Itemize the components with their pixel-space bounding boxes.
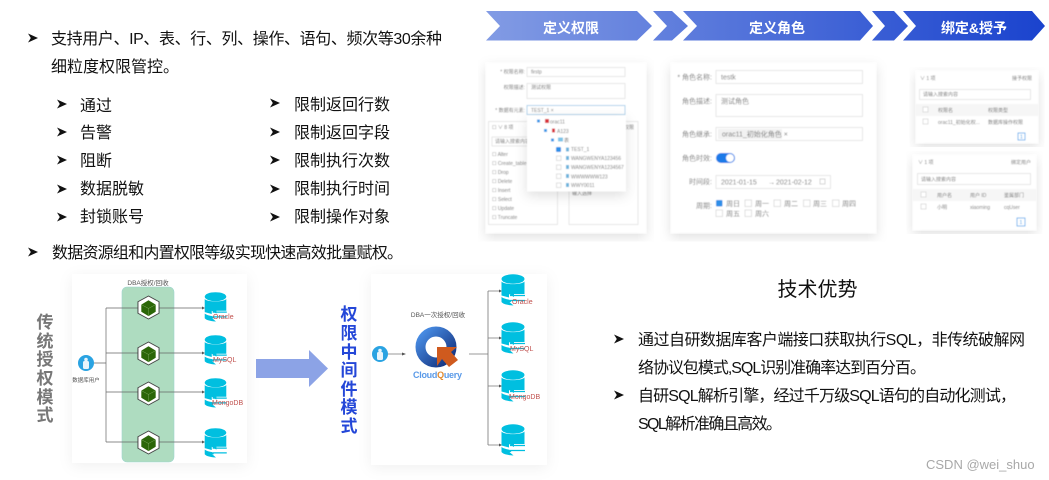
heading: middleware mode: 间 (340, 361, 358, 380)
list: limits: 限制操作对象 (294, 208, 390, 226)
panel: define permissions form: 输入选择 (572, 190, 592, 197)
arrow: define roles (683, 11, 873, 40)
bullet: SQL capture: 通过自研数据库客户端接口获取执行SQL，非传统破解网 (638, 331, 1025, 349)
bullet: SQL parser: 自研SQL解析引擎，经过千万级SQL语句的自动化测试， (638, 387, 1016, 405)
panel: define permissions form: 测试权限 (531, 84, 551, 91)
panel: grant permissions table: 接予权限 (1012, 75, 1032, 82)
dropdown: data tree: 表 (564, 137, 569, 144)
heading: traditional mode: 模 (36, 388, 54, 407)
list: actions: 通过 (80, 97, 112, 115)
dropdown: data tree: orac11 (550, 120, 565, 126)
panel: define roles form: 周期: (696, 202, 712, 210)
text block: technical advantages (614, 331, 1025, 433)
chevron (872, 11, 908, 40)
panel: bind users table: 小明 (937, 204, 947, 211)
databases (205, 292, 243, 458)
arrow: define permissions (486, 11, 652, 40)
panel: grant permissions table: 1 (1020, 134, 1023, 140)
icon: database user: 数据库用户 (72, 376, 100, 384)
panel: bind users table: 用户 ID (970, 192, 987, 199)
panel: bind users table: 鉴属部门 (1004, 192, 1024, 199)
arrow: traditional to middleware (256, 350, 328, 387)
panel: grant permissions table: 权限类型 (988, 107, 1008, 114)
panel: define roles form: orac11_初始化角色 × (722, 130, 788, 138)
list: actions: 阻断 (80, 152, 112, 170)
arrow: bind and grant (903, 11, 1045, 40)
panel: define permissions form: 请输入搜索内容 (495, 138, 530, 145)
arrow: define roles: 定义角色 (749, 20, 805, 36)
panel: bind users table: 请输入搜索内容 (921, 176, 956, 183)
panel: define roles form: 周三 (813, 200, 827, 208)
panel: define roles form: testk (721, 74, 736, 82)
panel: define roles form: 周五 (726, 210, 740, 218)
dropdown: data tree: WANGWENYA123456 (571, 156, 621, 162)
panel: define roles form: 角色继承: (682, 130, 712, 138)
panel: traditional diagram (72, 274, 247, 463)
heading: traditional mode: 统 (36, 331, 54, 351)
arrow: bind and grant: 绑定&授予 (941, 20, 1007, 36)
panel: define roles form: 2021-02-12 (776, 180, 812, 186)
panel: define roles form: 时间段: (689, 177, 712, 186)
panel: define permissions form: ☐ Delete (492, 179, 513, 185)
panel: define roles form: 周六 (755, 209, 769, 218)
panel: middleware diagram (371, 274, 547, 465)
dropdown: data tree: WWY0011 (571, 183, 595, 189)
heading: traditional mode: 式 (36, 406, 54, 425)
panel: define roles form (671, 63, 876, 233)
list: limits: 限制执行时间 (294, 180, 390, 198)
databases: MongoDB (212, 400, 243, 407)
panel: define roles form: 周四 (842, 200, 856, 208)
panel: define roles form: * 角色名称: (677, 72, 712, 82)
panel: grant permissions table: ∨ 1 项 (920, 76, 936, 82)
panel: define permissions form (486, 63, 646, 233)
text block: feature list (28, 29, 442, 262)
heading: traditional mode (36, 313, 54, 425)
panel: define roles form: 周日 (726, 200, 740, 208)
panel: define permissions form: ☐ ∨ 8 项 (492, 125, 513, 131)
panel: define permissions form: ☐ Create_table (492, 161, 527, 167)
heading: traditional mode: 授 (36, 350, 54, 369)
bullet: granular permissions (28, 29, 442, 76)
panel: define permissions form: * 数据有元素: (495, 107, 525, 114)
panel: define permissions form: ☐ Truncate (492, 215, 518, 221)
panel: bind users table: 绑定用户 (1011, 159, 1031, 166)
list: actions: 数据脱敏 (80, 180, 144, 198)
panel: define roles form: 周一 (755, 200, 769, 208)
databases: MySQL (510, 346, 533, 353)
chevron (653, 11, 688, 40)
panel: define roles form: 角色描述: (682, 96, 712, 106)
databases: Oracle (213, 314, 234, 321)
dropdown: data tree: TEST_1 (571, 147, 590, 153)
dropdown: data tree (527, 116, 626, 192)
heading: traditional mode: 传 (36, 313, 54, 332)
heading: middleware mode: 中 (340, 343, 358, 362)
heading: middleware mode: 权 (340, 305, 358, 324)
panel: bind users table (913, 155, 1036, 230)
icon: user (372, 346, 388, 362)
panel: define permissions form: TEST_1 × (531, 108, 554, 114)
panel: define permissions form: ☐ Update (492, 206, 514, 212)
panel: define permissions form: * 权限名称: (500, 68, 525, 76)
logo: CloudQuery (413, 332, 462, 380)
panel: grant permissions table: 请输入搜索内容 (923, 91, 958, 98)
panel: define roles form: 2021-01-15 (721, 180, 757, 186)
connector lines (94, 306, 205, 444)
logo: CloudQuery: CloudQuery (413, 370, 462, 380)
heading: middleware mode: 限 (340, 324, 358, 343)
dropdown: data tree: WWWWWW123 (571, 174, 608, 180)
icons: cubes (138, 296, 159, 454)
databases: MySQL (213, 357, 236, 364)
panel: grant permissions table (916, 71, 1038, 143)
panel: define roles form: 周二 (784, 200, 798, 208)
panel: define permissions form: 权限描述: (504, 84, 525, 91)
panel: define permissions form: ☐ Drop (492, 170, 509, 176)
dropdown: data tree: A123 (557, 129, 569, 135)
bullet: granular permissions: 细粒度权限管控。 (51, 58, 179, 76)
bullet: granular permissions: 支持用户、IP、表、行、列、操作、语句、频次等30余种 (51, 29, 442, 48)
panel: define permissions form: firstp (531, 70, 542, 76)
panel: bind users table: ∨ 1 项 (918, 160, 934, 166)
heading: technical advantages: 技术优势 (778, 278, 858, 301)
panel: define permissions form: 权限 (624, 124, 634, 131)
icon: database user (72, 355, 100, 384)
heading: middleware mode: 模 (340, 398, 358, 417)
arrow: define permissions: 定义权限 (543, 20, 599, 36)
databases (502, 274, 540, 456)
list: actions: 封锁账号 (80, 208, 144, 226)
panel: define roles form: 测试角色 (721, 96, 749, 106)
connector lines (388, 290, 502, 446)
panel: bind users table: cqUser (1004, 205, 1020, 211)
bullet: SQL parser: SQL解析准确且高效。 (638, 415, 782, 433)
bullet: SQL parser (614, 387, 1016, 433)
bullet: SQL capture (614, 331, 1025, 377)
heading: middleware mode (340, 305, 358, 436)
bullet: batch authorization: 数据资源组和内置权限等级实现快速高效批量赋权。 (52, 244, 403, 262)
process arrows (486, 11, 1045, 40)
label: DBA single authorization: DBA一次授权/回收 (411, 310, 466, 319)
green DBA column: DBA授权/回收 (127, 278, 169, 287)
panel: bind users table: 用户名 (937, 192, 952, 199)
green DBA column (122, 278, 174, 462)
list: limits: 限制返回行数 (294, 96, 390, 114)
panel: grant permissions table: 权限名 (938, 107, 953, 114)
heading: traditional mode: 权 (36, 369, 54, 388)
panel: define roles form: → (768, 180, 775, 186)
list: limits: 限制执行次数 (294, 152, 390, 170)
watermark: CSDN @wei_shuo (926, 457, 1035, 472)
databases: MongoDB (509, 394, 540, 401)
panel: bind users table: 1 (1020, 220, 1022, 226)
panel: define permissions form: ☐ Alter (492, 152, 508, 158)
panel: grant permissions table: orac11_初始化权... (938, 119, 980, 126)
heading: middleware mode: 件 (340, 380, 358, 399)
bullet: SQL capture: 络协议包模式,SQL识别准确率达到百分百。 (638, 358, 926, 377)
list: actions (57, 97, 144, 226)
panel: bind users table: xiaoming (970, 205, 990, 211)
panel: define permissions form: ☐ Insert (492, 188, 511, 194)
list: actions: 告警 (80, 124, 112, 142)
panel: define roles form: 角色时效: (682, 154, 712, 162)
heading: middleware mode: 式 (340, 417, 358, 436)
panel: grant permissions table: 数据库操作权限 (988, 119, 1023, 126)
list: limits (270, 96, 390, 226)
dropdown: data tree: WANGWENYA1234567 (571, 165, 624, 171)
panel: define permissions form: ☐ Select (492, 197, 512, 203)
list: limits: 限制返回字段 (294, 124, 390, 142)
databases: Oracle (512, 299, 533, 306)
